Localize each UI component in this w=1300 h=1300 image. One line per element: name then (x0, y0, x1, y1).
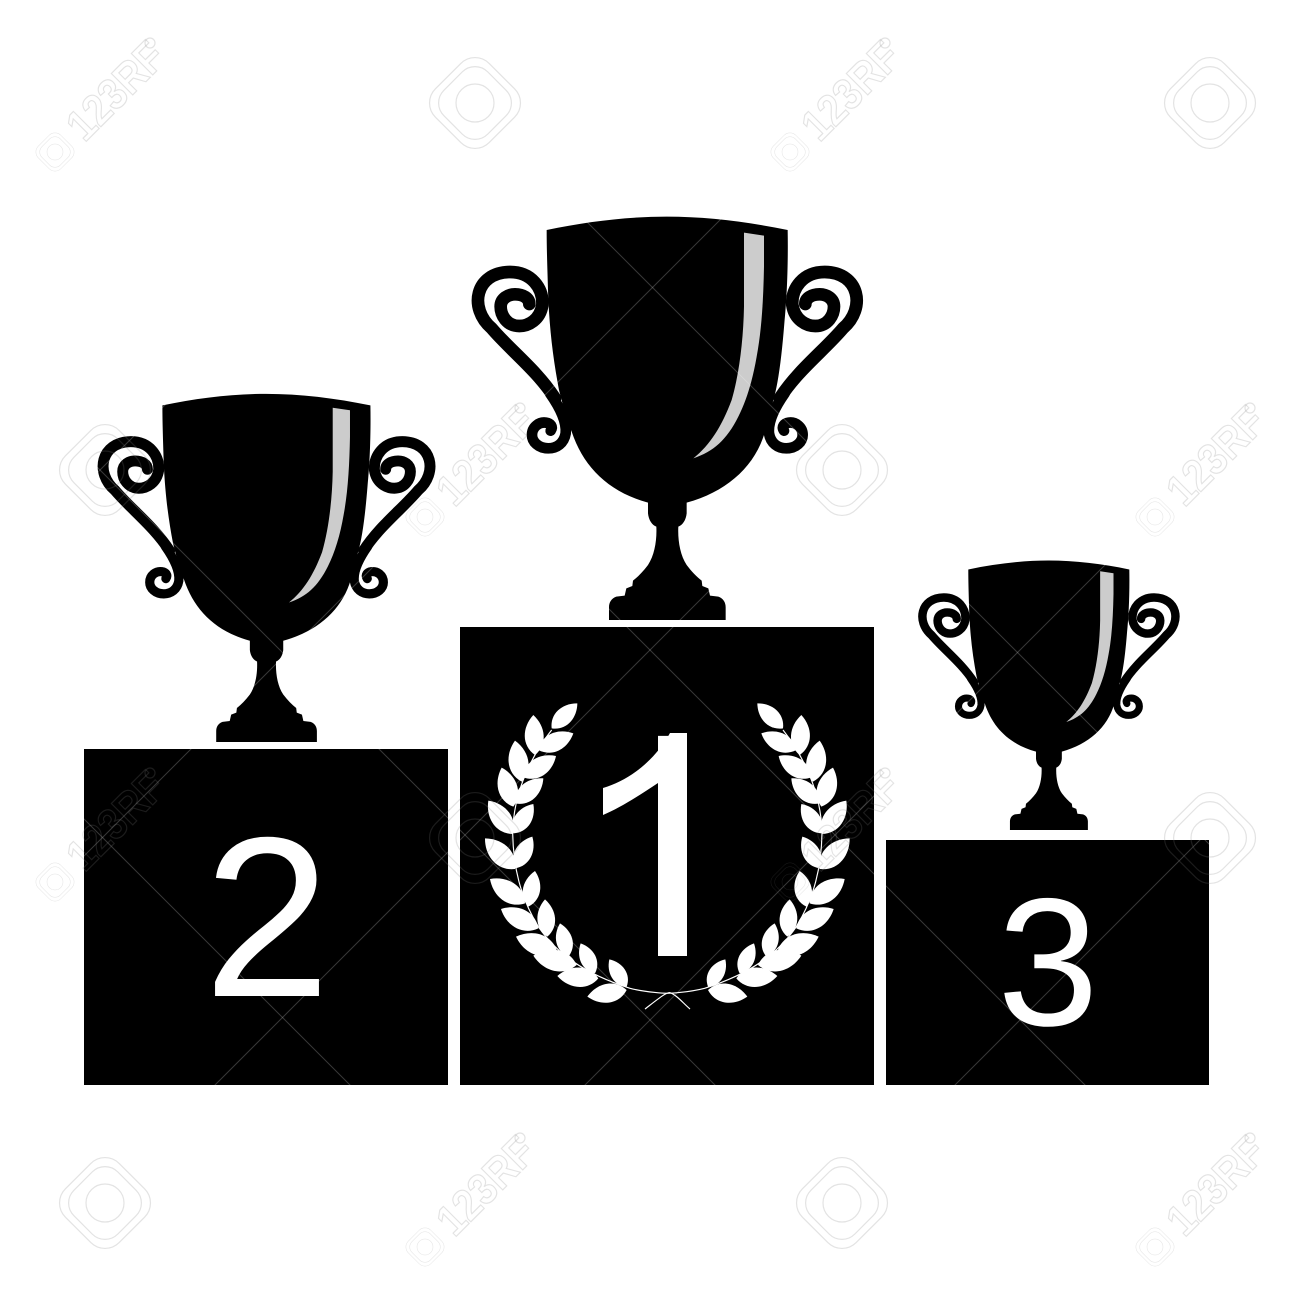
number 3: 3 (997, 860, 1099, 1064)
podium block: second place (84, 749, 448, 1085)
podium block: first place (460, 627, 874, 1085)
trophy: first place (478, 217, 857, 620)
number 1: 1 (566, 666, 743, 1024)
number 1 (603, 733, 687, 956)
trophy: third place (922, 561, 1175, 830)
podium block: third place (886, 840, 1209, 1085)
trophy: second place (103, 394, 430, 742)
number 2: 2 (204, 791, 330, 1045)
laurel wreath (478, 697, 857, 1009)
